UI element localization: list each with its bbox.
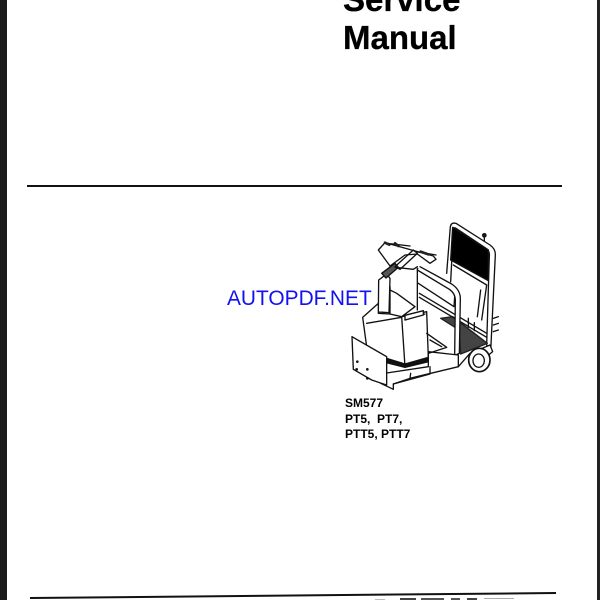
model numbers: PTT5, PTT7	[345, 427, 410, 441]
watermark: AUTOPDF.NET	[227, 287, 372, 310]
rear frame	[447, 223, 498, 352]
top divider rule	[27, 185, 562, 187]
title: Service Manual	[343, 0, 460, 56]
battery body	[363, 287, 428, 367]
steering handlebar	[378, 243, 436, 269]
model numbers: SM577	[345, 396, 383, 410]
right page edge	[597, 0, 600, 600]
chassis base	[380, 352, 458, 389]
rear wheel	[458, 345, 493, 372]
bottom rule	[30, 592, 556, 599]
steering column	[378, 274, 390, 313]
guard rail	[417, 267, 460, 355]
title: Service Manual: Manual	[343, 19, 457, 56]
cropped footer text	[375, 598, 514, 600]
model numbers	[345, 396, 410, 441]
illustration: tow tractor	[351, 222, 499, 390]
platform floor mat	[441, 317, 487, 354]
model numbers: PT5, PT7,	[345, 412, 402, 426]
left page edge	[0, 0, 7, 600]
front bumper plate	[352, 337, 387, 385]
side panel	[417, 268, 487, 337]
